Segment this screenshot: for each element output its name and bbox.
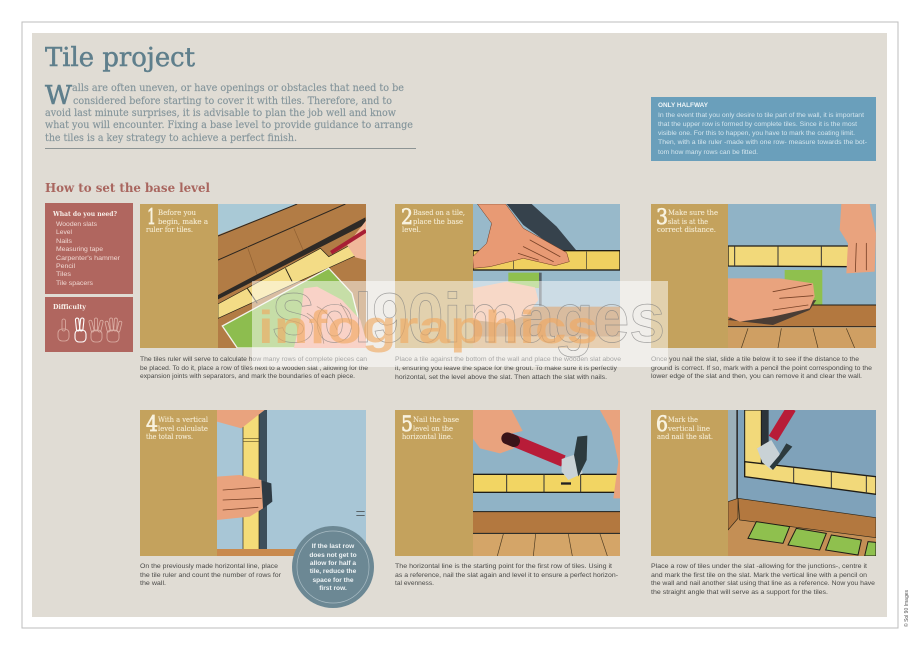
panel: step 6 xyxy=(651,408,876,596)
step label xyxy=(656,412,713,441)
callout: last row circle xyxy=(292,526,374,608)
illustration: hammering the slat xyxy=(473,410,620,556)
step label: Make sure the xyxy=(668,208,718,217)
step label: Mark the xyxy=(668,415,698,424)
step label: 2 xyxy=(401,205,413,229)
caption: it, ensuring you leave the space for the grout. To make sure it is perfectly xyxy=(395,365,618,372)
callout: last row circle: does not get to xyxy=(309,552,357,559)
step label: and nail the slat. xyxy=(657,432,713,441)
step label: ruler for tiles. xyxy=(146,225,193,234)
callout: only halfway xyxy=(651,97,876,161)
panel: step 2 xyxy=(395,204,621,381)
panel: difficulty xyxy=(45,297,133,352)
title: Tile project xyxy=(45,43,196,73)
caption xyxy=(395,356,621,381)
callout: only halfway: visible one. For this to happen, you have to mark the coating limit. xyxy=(658,130,855,137)
caption: be placed. To do it, place a row of tiles next to a wooden slat , allowing for the xyxy=(140,365,368,372)
step label: slat is at the xyxy=(668,217,708,226)
icon: hand one finger xyxy=(58,319,69,341)
illustration: placing the base level xyxy=(473,204,620,348)
step label: 5 xyxy=(401,412,413,436)
step label: 6 xyxy=(656,412,668,436)
watermark: infographics xyxy=(258,301,598,353)
heading: how to set the base level: How to set the base level xyxy=(45,181,210,195)
caption xyxy=(140,563,282,587)
step label: place the base xyxy=(413,217,463,226)
text block: introduction: considered before starting to cover it with tiles. Therefore, and to xyxy=(73,95,392,107)
caption: tal evenness. xyxy=(395,580,434,587)
callout: last row circle: allow for half a xyxy=(310,560,356,567)
step label: 4 xyxy=(146,412,158,436)
illustration: vertical slat and tiles xyxy=(728,410,876,556)
step label: level calculate xyxy=(158,424,208,433)
caption: The tiles ruler will serve to calculate how many rows of complete pieces can xyxy=(140,356,367,363)
panel: what do you need xyxy=(45,203,133,294)
step label xyxy=(401,205,465,234)
panel: step 5 xyxy=(395,410,620,587)
panel: step 1 xyxy=(140,204,368,380)
icon: hand three fingers xyxy=(89,318,103,342)
icon: hand two fingers (selected) xyxy=(75,318,86,342)
panel: what do you need: Pencil xyxy=(56,263,76,270)
panel: what do you need: Tile spacers xyxy=(56,280,94,287)
panel: what do you need: Tiles xyxy=(56,271,72,278)
caption: and mark the first tile on the slat. Mark the vertical line with a pencil on xyxy=(651,572,867,579)
caption: the tile ruler and count the number of rows for xyxy=(140,572,282,579)
step label: horizontal line. xyxy=(402,432,453,441)
caption: lower edge of the slat and then, you can remove it and clear the wall. xyxy=(651,373,862,380)
caption: Place a row of tiles under the slat -allowing for the junctions-, centre it xyxy=(651,563,867,570)
caption: the straight angle that will serve as a support for the tiles. xyxy=(651,589,828,596)
step label: level. xyxy=(402,225,421,234)
caption: the wall and nail another slat using that line as a reference. Now you have xyxy=(651,580,875,587)
illustration: marking a ruler xyxy=(218,204,366,348)
step label: Based on a tile, xyxy=(413,208,465,217)
step label: 1 xyxy=(147,205,156,229)
callout: last row circle: space for the xyxy=(312,577,354,584)
step label: correct distance. xyxy=(657,225,716,234)
step label xyxy=(146,412,209,441)
callout: last row circle: If the last row xyxy=(312,543,355,550)
panel: what do you need: Carpenter's hammer xyxy=(56,255,121,262)
step label: Before you xyxy=(158,208,196,217)
text block: introduction: alls are often uneven, or have openings or obstacles that need to be xyxy=(72,82,404,94)
callout: only halfway: tom how many rows can be fitted. xyxy=(658,149,758,156)
illustration: vertical level xyxy=(217,410,366,556)
panel: what do you need: What do you need? xyxy=(52,210,117,218)
caption: horizontal, set the level above the slat. Then attach the slat with nails. xyxy=(395,374,607,381)
panel: difficulty: Difficulty xyxy=(53,303,86,311)
step label: vertical line xyxy=(667,424,710,433)
step label: With a vertical xyxy=(158,415,209,424)
caption xyxy=(651,563,875,596)
step label: the total rows. xyxy=(146,432,193,441)
panel: what do you need: Measuring tape xyxy=(56,246,103,253)
icon: hand four fingers xyxy=(105,318,122,342)
caption: the wall. xyxy=(140,580,166,587)
step label: Nail the base xyxy=(413,415,459,424)
watermark: Sol90images xyxy=(272,279,665,357)
caption xyxy=(395,563,618,587)
caption: ground is correct. If so, mark with a pencil the point corresponding to the xyxy=(651,365,872,372)
callout: last row circle: tile, reduce the xyxy=(310,568,357,575)
callout: last row circle: first row. xyxy=(319,585,347,592)
text block: introduction: avoid last minute surprises, it is advisable to plan the job well and know xyxy=(45,107,396,119)
caption: Place a tile against the bottom of the wall and place the wooden slat above xyxy=(395,356,621,363)
panel: what do you need: Level xyxy=(56,229,73,236)
callout: only halfway: that the upper row is formed by complete tiles. Since it is the most xyxy=(658,121,857,128)
caption: expansion joints with separators, and mark the boundaries of each piece. xyxy=(140,373,355,380)
callout: only halfway: In the event that you only desire to tile part of the wall, it is important xyxy=(658,112,864,119)
caption: On the previously made horizontal line, place xyxy=(140,563,278,570)
caption: Once you nail the slat, slide a tile below it to see if the distance to the xyxy=(651,356,859,363)
panel: what do you need: Nails xyxy=(56,238,73,245)
caption xyxy=(651,356,872,380)
callout: only halfway: Then, with a tile ruler -made with one row- measure towards the bot- xyxy=(658,139,867,146)
callout: only halfway: ONLY HALFWAY xyxy=(658,102,709,109)
caption: The horizontal line is the starting point for the first row of tiles. Using it xyxy=(395,563,612,570)
step label: level on the xyxy=(413,424,453,433)
illustration: checking the distance xyxy=(728,204,876,348)
step label xyxy=(401,412,459,441)
panel: step 3 xyxy=(651,204,876,380)
text block: introduction: the tiles is a key strategy to achieve a perfect finish. xyxy=(45,132,297,144)
credit: © Sol 90 Images xyxy=(903,590,910,627)
step label: 3 xyxy=(656,205,668,229)
text block: introduction: W xyxy=(45,81,72,111)
caption xyxy=(140,356,368,380)
step label xyxy=(656,205,718,234)
panel: step 4 xyxy=(140,410,374,608)
caption: as a reference, nail the slat again and level it to ensure a perfect horizon- xyxy=(395,572,618,579)
text block: introduction xyxy=(45,81,416,149)
step label: begin, make a xyxy=(158,217,209,226)
step label xyxy=(146,205,209,234)
text block: introduction: what you will encounter. Fixing a base level to provide guidance to arrange xyxy=(45,119,413,131)
panel: what do you need: Wooden slats xyxy=(56,221,98,228)
